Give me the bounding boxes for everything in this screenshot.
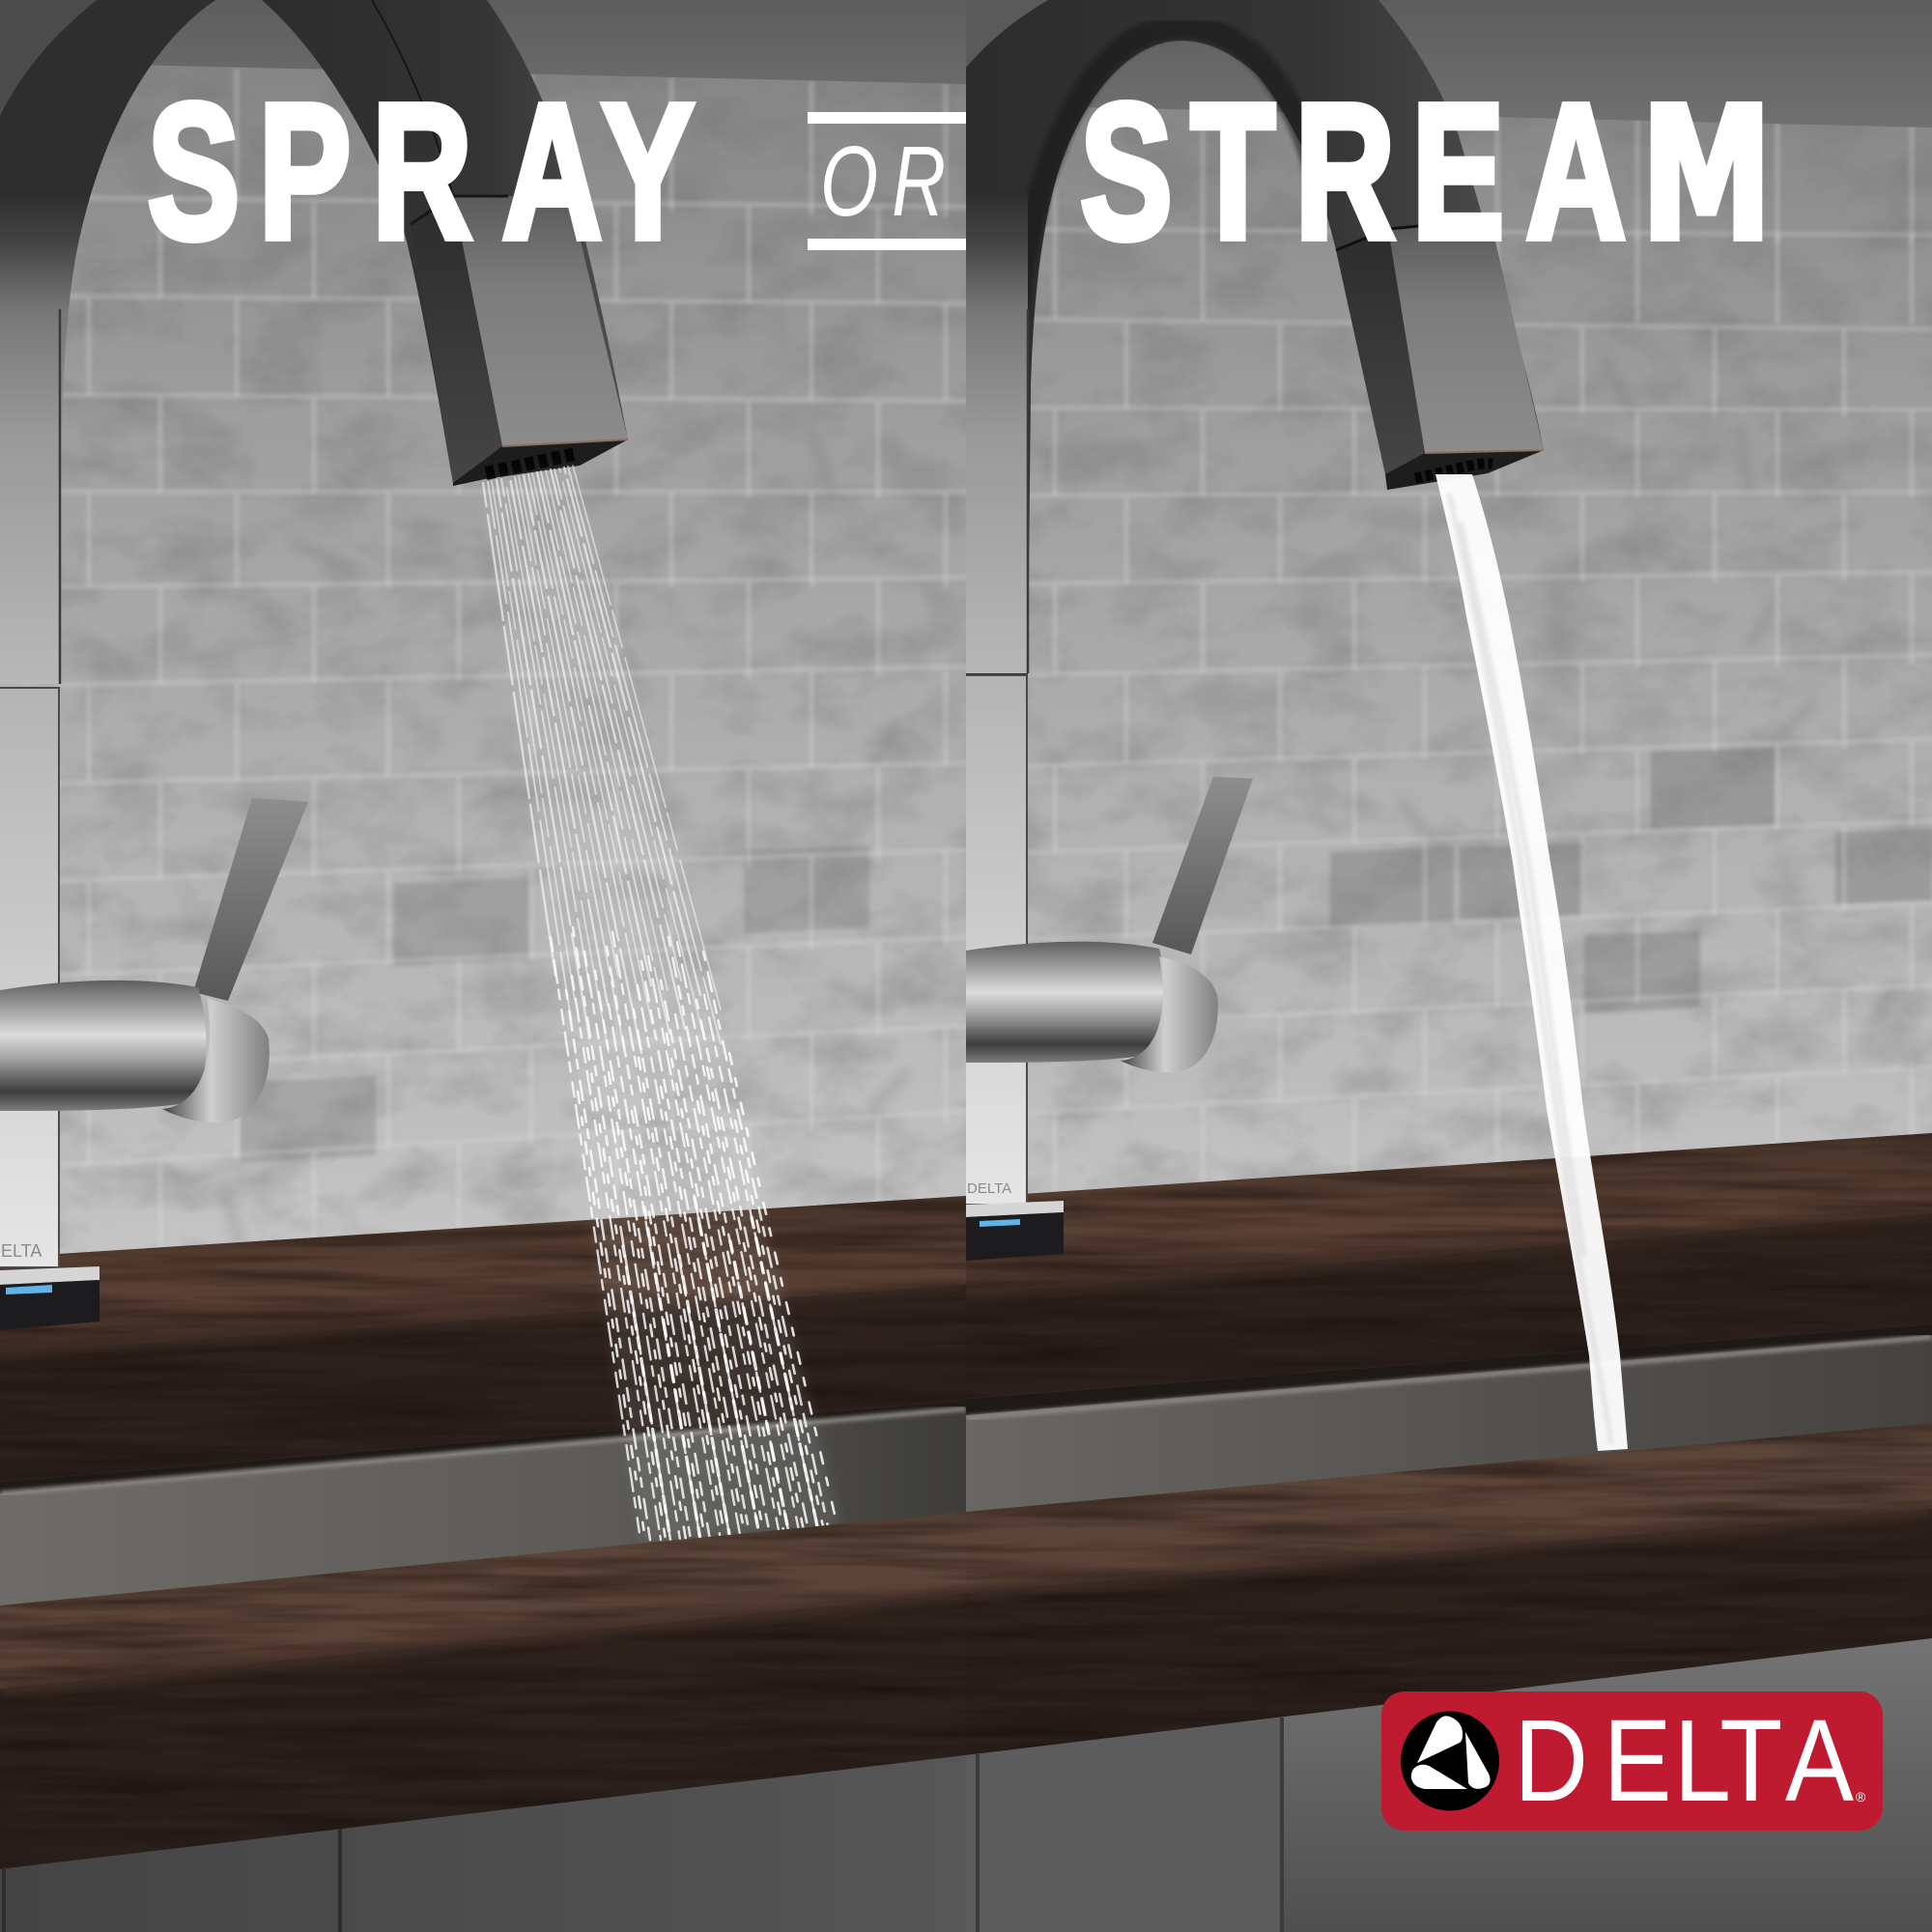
etched brand mark: DELTA	[967, 1180, 1011, 1197]
title: STREAM: M	[1641, 70, 1772, 281]
title: STREAM: STREA	[1080, 64, 1626, 278]
handle blade	[193, 798, 308, 1001]
handle cap	[1121, 956, 1218, 1072]
marble tile backsplash	[0, 48, 976, 1275]
title: SPRAY: SPRAY	[148, 64, 694, 278]
badge background	[1381, 1691, 1883, 1831]
upper wall above backsplash	[151, 0, 966, 84]
near countertop	[0, 1512, 966, 1869]
rear countertop	[0, 1196, 966, 1482]
near countertop	[966, 1423, 1932, 1755]
rule bottom	[808, 239, 966, 250]
logo: Delta badge	[1381, 1691, 1883, 1831]
icon: Delta triangle mark	[1401, 1712, 1499, 1810]
cabinet doors	[0, 1755, 966, 1932]
spray head	[453, 440, 628, 486]
spray head	[1385, 450, 1544, 490]
faucet arch	[966, 0, 1544, 676]
rear countertop	[966, 1133, 1932, 1399]
upper fine streams	[483, 466, 721, 1053]
word OR: OR	[820, 127, 946, 238]
sink basin	[0, 1401, 966, 1613]
wordmark: DELTA	[1514, 1696, 1854, 1827]
faucet	[961, 0, 1544, 1261]
spout faces	[372, 0, 628, 483]
cabinet doors	[966, 1638, 1932, 1932]
panel: stream (right photo)	[956, 0, 1932, 1932]
faucet base	[966, 1201, 1064, 1261]
marble tile backsplash	[956, 97, 1932, 1217]
water stream	[1435, 474, 1628, 1451]
handle body	[0, 980, 207, 1111]
spout faces	[1336, 226, 1544, 474]
lower column	[0, 688, 59, 1267]
connector: OR with rules	[808, 112, 966, 250]
registered mark: ®	[1856, 1789, 1866, 1804]
droplets	[551, 927, 840, 1540]
faucet base	[0, 1266, 99, 1330]
panel: spray (left photo)	[0, 0, 976, 1932]
rule top	[808, 112, 966, 124]
sink basin	[966, 1324, 1932, 1517]
handle body	[966, 942, 1167, 1063]
handle cap	[162, 998, 270, 1122]
water spray	[483, 466, 840, 1540]
handle blade	[1152, 777, 1253, 954]
faucet arch	[0, 0, 628, 684]
upper wall above backsplash	[966, 0, 1932, 135]
lower column	[961, 675, 1027, 1205]
faucet	[0, 0, 628, 1330]
